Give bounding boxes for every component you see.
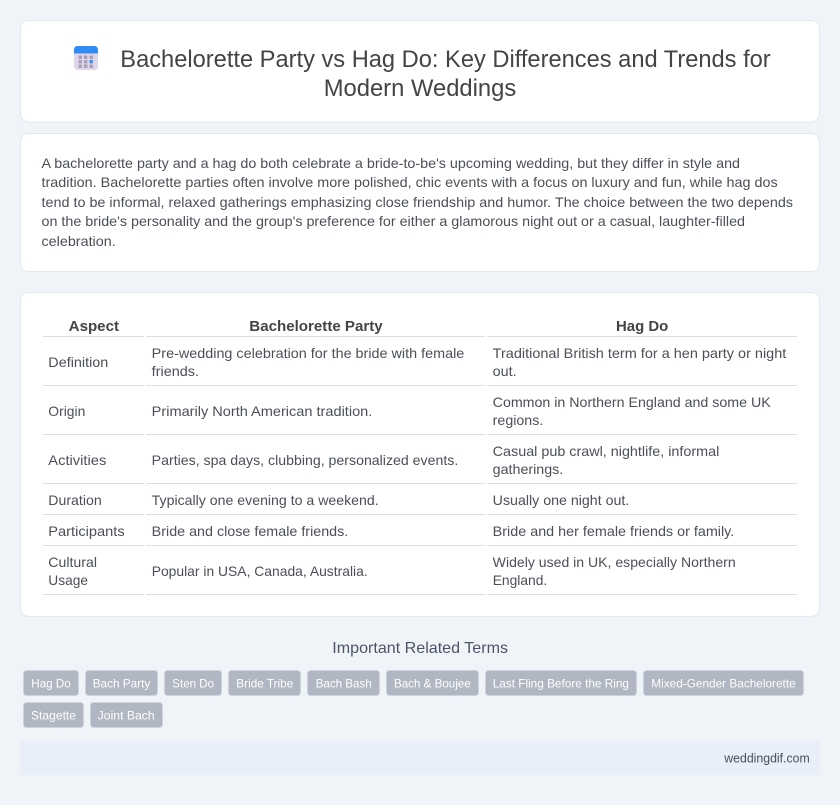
tag: Stagette: Stagette xyxy=(31,708,76,722)
row: cultural usage xyxy=(43,554,797,595)
row: duration: Typically one evening to a weekend. xyxy=(152,492,379,508)
intro text: on the bride's personality and the group's preference for either a glamorous night out or a casual, laughter-filled xyxy=(42,213,745,229)
intro text: tradition. Bachelorette parties often involve more polished, chic events with a focus on luxury and fun, while hag dos xyxy=(42,174,778,190)
panel: comparison table xyxy=(20,292,820,616)
tag: Bach & Boujee xyxy=(386,670,478,696)
row: duration xyxy=(43,492,797,515)
tag: Sten Do: Sten Do xyxy=(172,676,214,690)
row: cultural usage: Cultural xyxy=(48,554,97,570)
row: origin xyxy=(43,394,797,435)
panel: intro xyxy=(20,134,820,272)
row: origin: Common in Northern England and some UK xyxy=(493,394,771,410)
tag: Joint Bach xyxy=(90,702,162,728)
footer: weddingdif.com xyxy=(723,751,810,765)
title xyxy=(120,46,771,102)
table header row: Bachelorette Party xyxy=(249,319,383,335)
panel: header xyxy=(20,20,820,122)
tag: Joint Bach: Joint Bach xyxy=(98,708,155,722)
row: participants: Participants xyxy=(48,523,125,539)
row: activities: Casual pub crawl, nightlife, informal xyxy=(493,443,719,459)
row: cultural usage: Widely used in UK, especially Northern xyxy=(493,554,736,570)
row: definition: Definition xyxy=(48,354,108,370)
row: origin: regions. xyxy=(493,412,543,428)
heading: important related terms: Important Related Terms xyxy=(332,640,508,657)
row: activities xyxy=(43,443,797,484)
row: definition: friends. xyxy=(152,363,199,379)
table header row xyxy=(43,319,797,337)
title: Modern Weddings xyxy=(324,75,516,102)
row: participants: Bride and her female friends or family. xyxy=(493,523,734,539)
row: duration: Duration xyxy=(48,492,102,508)
tag: Bride Tribe: Bride Tribe xyxy=(236,676,294,690)
table header row: Aspect xyxy=(69,319,119,335)
tag: Bach Party: Bach Party xyxy=(93,676,150,690)
row: definition xyxy=(43,345,797,386)
row: definition: Pre-wedding celebration for the bride with female xyxy=(152,345,465,361)
tag: Last Fling Before the Ring xyxy=(486,670,636,696)
intro text xyxy=(42,155,793,249)
row: cultural usage: Popular in USA, Canada, Australia. xyxy=(152,563,368,579)
title: Bachelorette Party vs Hag Do: Key Differences and Trends for xyxy=(120,46,771,73)
tag: Mixed-Gender Bachelorette xyxy=(644,670,804,696)
row: cultural usage: Usage xyxy=(48,572,88,588)
row: participants: Bride and close female friends. xyxy=(152,523,348,539)
intro text: tend to be informal, relaxed gatherings emphasizing close friendship and humor. The choice between the two depends xyxy=(42,194,793,210)
tag: Bach Bash xyxy=(308,670,380,696)
tag: Hag Do xyxy=(24,670,78,696)
tag: Last Fling Before the Ring: Last Fling Before the Ring xyxy=(493,676,629,690)
tag: Bach & Boujee: Bach & Boujee xyxy=(394,676,471,690)
intro text: A bachelorette party and a hag do both celebrate a bride-to-be's upcoming wedding, but they differ in style and xyxy=(42,155,740,171)
intro text: celebration. xyxy=(42,233,116,249)
tag: Bride Tribe xyxy=(228,670,300,696)
row: activities: gatherings. xyxy=(493,461,563,477)
row: definition: out. xyxy=(493,363,517,379)
row: origin: Primarily North American tradition. xyxy=(152,403,372,419)
tag: Stagette xyxy=(24,702,84,728)
row: cultural usage: England. xyxy=(493,572,547,588)
tag: Bach Party xyxy=(86,670,158,696)
tag: Sten Do xyxy=(164,670,222,696)
tag: Bach Bash: Bach Bash xyxy=(316,676,372,690)
row: origin: Origin xyxy=(48,403,85,419)
row: activities: Parties, spa days, clubbing, personalized events. xyxy=(152,452,458,468)
tags: related terms xyxy=(24,670,804,728)
tag: Mixed-Gender Bachelorette: Mixed-Gender Bachelorette xyxy=(651,676,796,690)
row: activities: Activities xyxy=(48,452,106,468)
row: duration: Usually one night out. xyxy=(493,492,629,508)
icon: calendar xyxy=(74,46,98,70)
table header row: Hag Do xyxy=(616,319,668,335)
footer xyxy=(20,741,820,775)
row: definition: Traditional British term for a hen party or night xyxy=(493,345,786,361)
row: participants xyxy=(43,523,797,546)
tag: Hag Do: Hag Do xyxy=(31,676,71,690)
